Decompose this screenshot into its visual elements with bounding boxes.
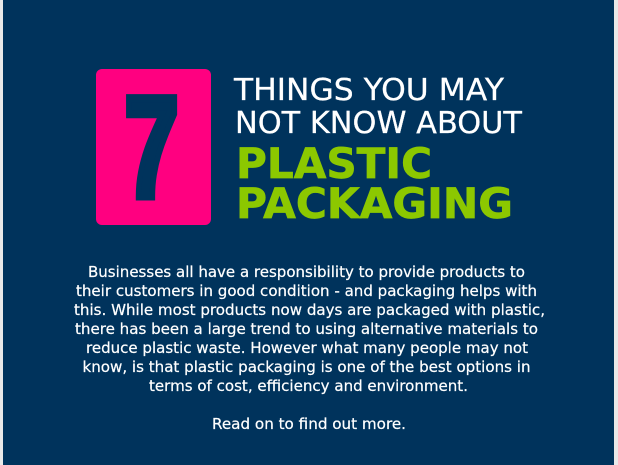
title: PACKAGING: [236, 179, 513, 228]
text block: introduction: terms of cost, efficiency and environment.: [149, 377, 468, 395]
title: [233, 73, 522, 228]
title: THINGS YOU MAY: [233, 73, 504, 108]
text block: introduction: there has been a large trend to using alternative materials to: [75, 320, 538, 338]
badge: pink number 7: [96, 67, 211, 227]
title: PLASTIC: [236, 139, 432, 188]
text block: introduction: Businesses all have a responsibility to provide products to: [88, 263, 525, 281]
text block: introduction: their customers in good condition - and packaging helps with: [76, 282, 537, 300]
text block: read on: Read on to find out more.: [212, 415, 406, 433]
text block: introduction: know, is that plastic packaging is one of the best options in: [82, 358, 530, 376]
text block: introduction: reduce plastic waste. However what many people may not: [86, 339, 528, 357]
title: NOT KNOW ABOUT: [235, 106, 522, 141]
text block: introduction: this. While most products now days are packaged with plastic,: [74, 301, 545, 319]
text block: introduction: [74, 263, 545, 395]
badge: pink number 7: 7: [125, 67, 179, 227]
